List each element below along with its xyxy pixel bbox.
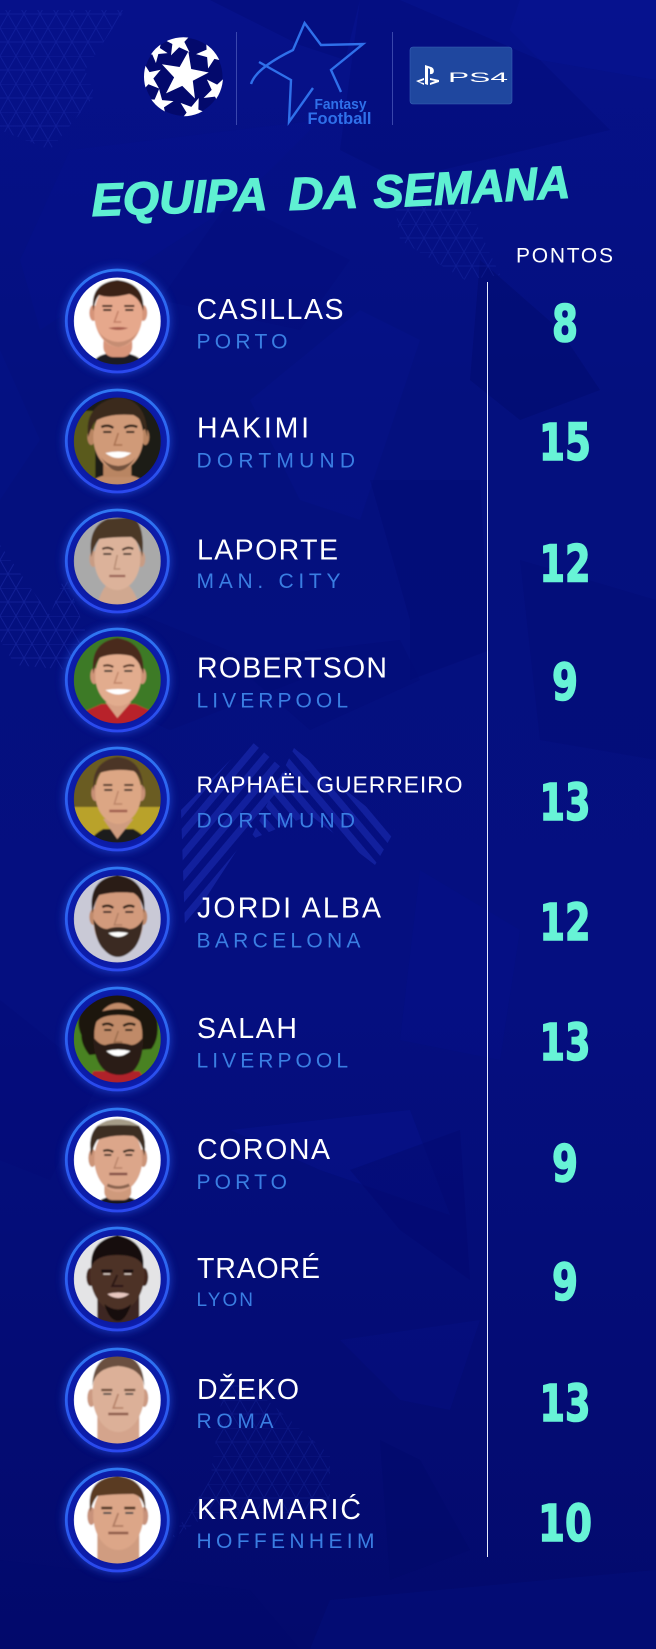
points: 13	[540, 774, 590, 833]
player name: DŽEKO	[197, 1374, 299, 1406]
avatar	[65, 389, 169, 493]
avatar	[65, 987, 169, 1091]
title	[91, 156, 571, 226]
icon: champions league starball	[144, 37, 223, 116]
title: SEMANA	[372, 156, 571, 218]
club: DORTMUND	[196, 810, 355, 833]
avatar	[65, 747, 169, 851]
row: Laporte	[65, 509, 591, 613]
club: DORTMUND	[196, 450, 355, 473]
row: Raphael Guerreiro	[65, 747, 591, 851]
divider line	[487, 282, 488, 1557]
points: 9	[552, 1136, 578, 1195]
club: MAN. CITY	[196, 570, 340, 593]
player name: CASILLAS	[196, 294, 344, 326]
points: 9	[552, 1254, 578, 1313]
row: Kramaric	[65, 1468, 592, 1572]
player name: JORDI ALBA	[197, 893, 381, 925]
avatar	[65, 269, 169, 373]
club: BARCELONA	[196, 930, 360, 953]
club: ROMA	[196, 1410, 274, 1433]
player name: TRAORÉ	[197, 1253, 320, 1285]
icon: fantasy football star	[251, 23, 372, 128]
divider	[392, 32, 393, 125]
club: LIVERPOOL	[196, 690, 348, 713]
club: PORTO	[196, 330, 288, 353]
points: 12	[540, 894, 590, 953]
points: 13	[540, 1014, 590, 1073]
avatar	[65, 1348, 169, 1452]
icon: ps4 badge	[410, 47, 512, 104]
player name: RAPHAËL GUERREIRO	[196, 772, 462, 798]
club: HOFFENHEIM	[196, 1530, 374, 1553]
avatar	[65, 1227, 169, 1331]
player name: SALAH	[197, 1013, 297, 1045]
row: Casillas	[65, 269, 578, 373]
points: 10	[538, 1495, 592, 1554]
points: 13	[540, 1375, 590, 1434]
club: LYON	[196, 1290, 253, 1311]
row: Dzeko	[65, 1348, 591, 1452]
points: 9	[552, 654, 578, 713]
avatar	[65, 509, 169, 613]
row: Traore	[65, 1227, 578, 1331]
club: LIVERPOOL	[196, 1050, 348, 1073]
points: 8	[552, 296, 578, 355]
row: Corona	[65, 1108, 578, 1212]
icon: fantasy football star: Football	[308, 109, 372, 128]
icon: ps4 badge: PS4	[448, 69, 508, 85]
player name: LAPORTE	[197, 534, 338, 566]
player name: KRAMARIĆ	[197, 1494, 361, 1526]
player name: HAKIMI	[197, 413, 309, 445]
row: Hakimi	[65, 389, 591, 493]
title: EQUIPA	[91, 168, 268, 226]
avatar	[65, 1108, 169, 1212]
avatar	[65, 867, 169, 971]
points: 12	[540, 536, 590, 595]
divider	[236, 32, 237, 125]
title: DA	[288, 166, 359, 220]
icon: fantasy football star: Fantasy	[314, 96, 367, 113]
player name: CORONA	[197, 1134, 330, 1166]
player name: ROBERTSON	[197, 653, 387, 685]
row: Salah	[65, 987, 591, 1091]
avatar	[65, 1468, 169, 1572]
row: Robertson	[65, 628, 578, 732]
points: 15	[539, 414, 591, 473]
header logos	[130, 23, 512, 132]
avatar	[65, 628, 169, 732]
column heading: pontos: PONTOS	[516, 244, 613, 268]
club: PORTO	[196, 1171, 287, 1194]
row: Jordi Alba	[65, 867, 591, 971]
